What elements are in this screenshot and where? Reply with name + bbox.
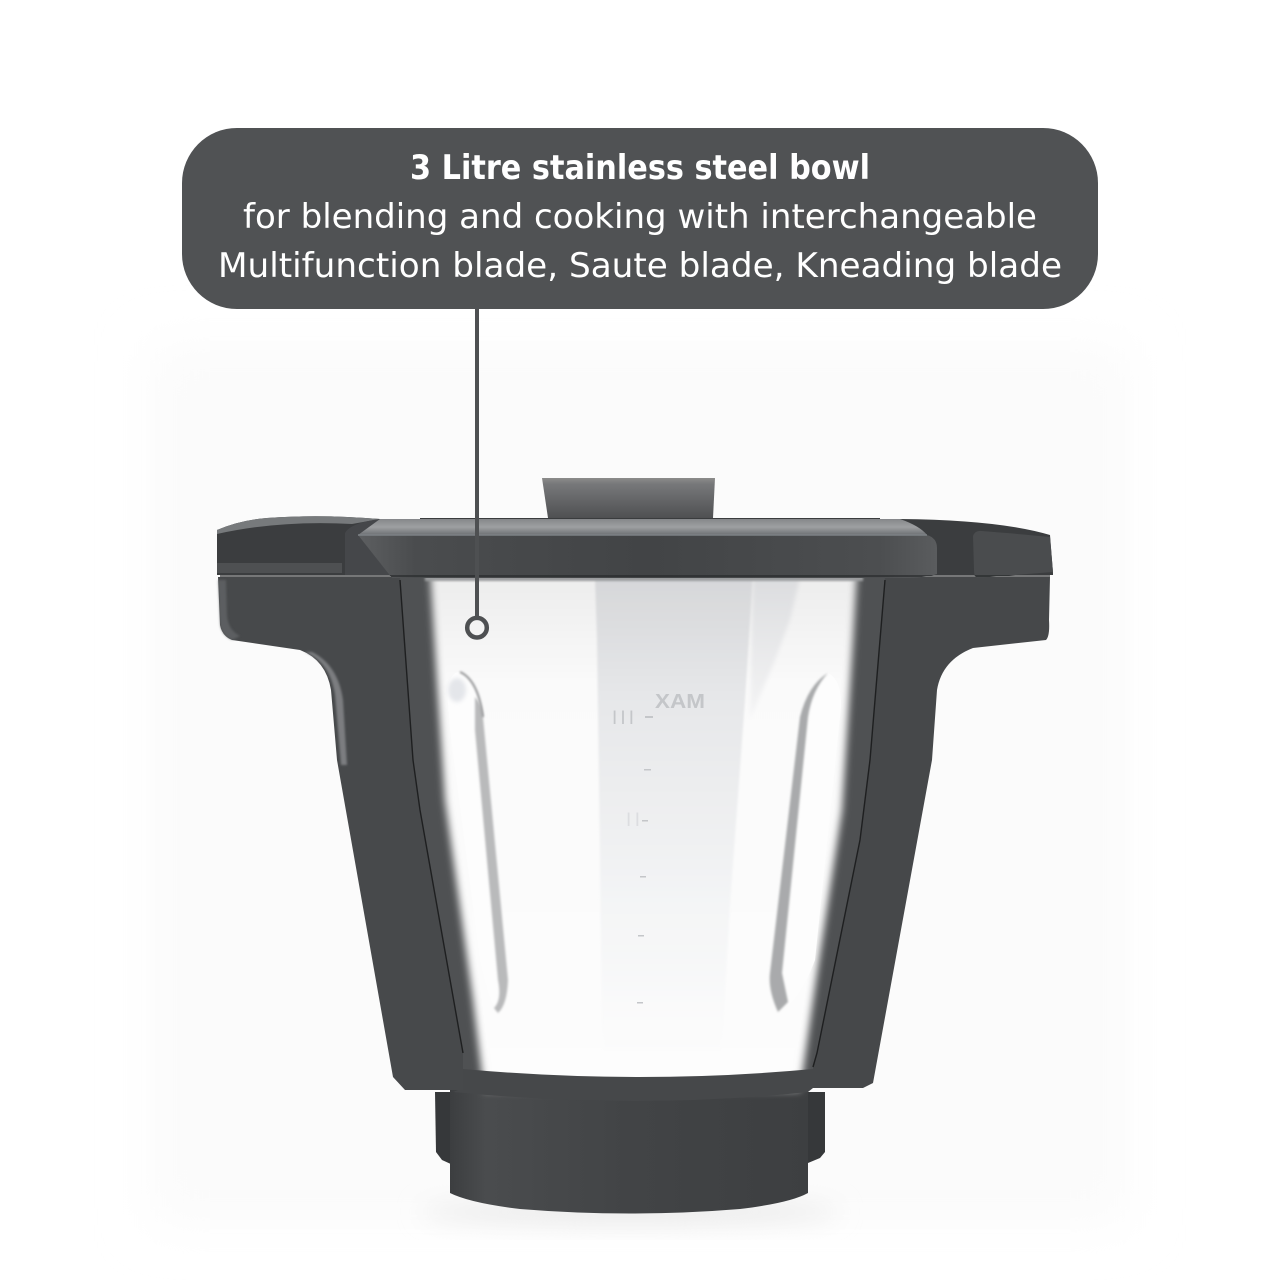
left viewing slot: [447, 672, 508, 1013]
embossed measuring marks: MAX: [654, 691, 705, 713]
right viewing slot: [770, 673, 841, 1012]
base ring and side tabs: [435, 1090, 825, 1214]
top shadow under lid: [425, 576, 863, 581]
lid: [217, 516, 1053, 578]
callout pointer line and ring: [467, 305, 487, 638]
callout panel: [182, 128, 1098, 309]
base collar band: [453, 1069, 813, 1101]
embossed measuring marks: II: [626, 810, 640, 831]
callout text line 2: Multifunction blade, Saute blade, Kneading blade: [218, 246, 1062, 286]
product photo: blender bowl: [217, 478, 1053, 1226]
base shadow: [420, 1198, 840, 1226]
left handle: [218, 577, 463, 1090]
stainless steel bowl body: [380, 570, 905, 1090]
central brushed band: [595, 578, 753, 1050]
embossed measuring marks: [612, 691, 705, 1004]
embossed measuring marks: III: [612, 708, 634, 729]
callout heading: 3 Litre stainless steel bowl: [410, 148, 870, 188]
lid cap on top: [542, 478, 715, 518]
right handle: [813, 577, 1050, 1088]
callout text line 1: for blending and cooking with interchangeable: [243, 197, 1037, 237]
